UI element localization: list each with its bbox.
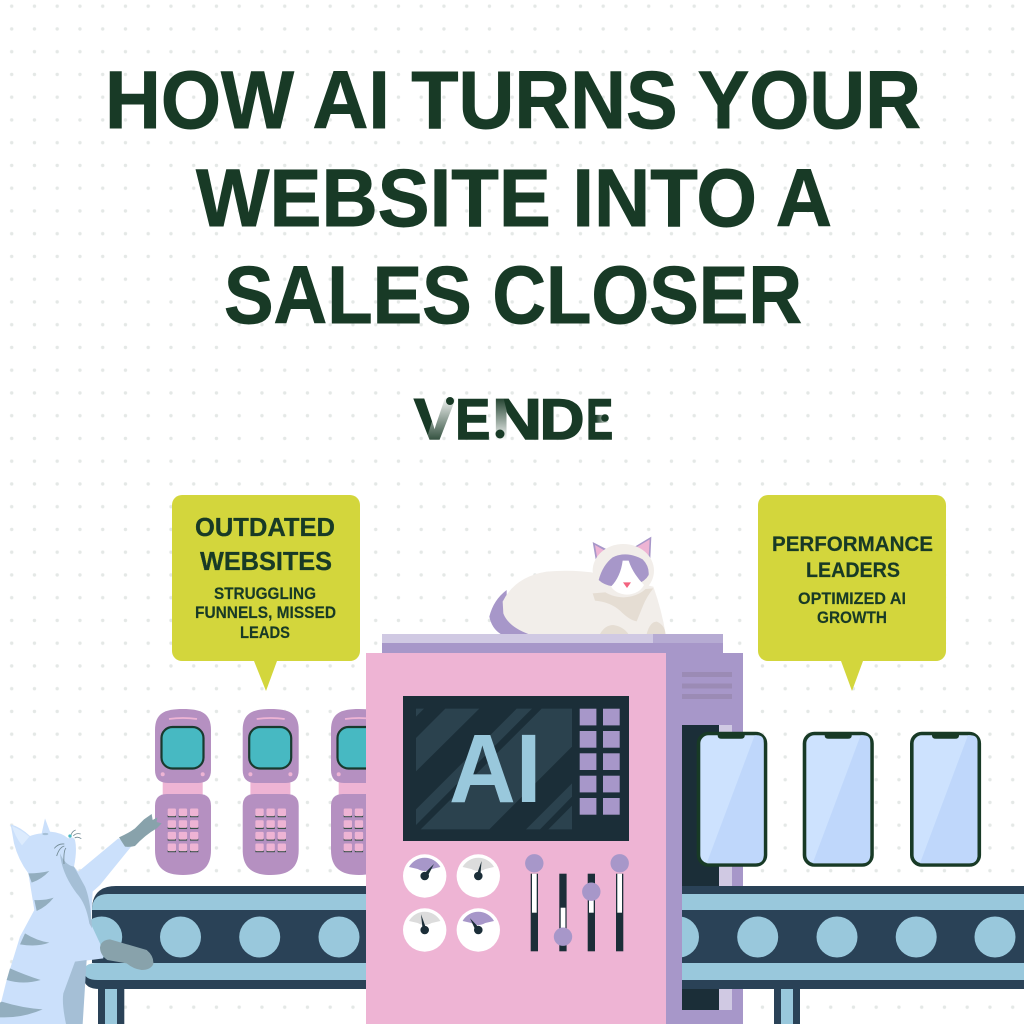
title: [105, 55, 921, 341]
callout: outdated websites: FUNNELS, MISSED: [195, 603, 336, 622]
flip phone 2: [243, 709, 299, 875]
callout: performance leaders: [758, 495, 946, 691]
inner ear: [12, 826, 29, 845]
logo: VENDE: V: [414, 388, 455, 452]
screen buttons: [580, 709, 620, 815]
control screen: [403, 696, 629, 841]
smartphones: [698, 734, 979, 865]
sliders: [525, 854, 629, 951]
callout: outdated websites: [172, 495, 360, 691]
callout: outdated websites: STRUGGLING: [214, 584, 316, 603]
callout: outdated websites: OUTDATED: [195, 512, 335, 542]
flip phone 1: [155, 709, 211, 875]
smartphone 3: [912, 734, 979, 865]
machine side: [666, 653, 743, 1024]
right conveyor belt: [658, 886, 1024, 1024]
callout: outdated websites: LEADS: [240, 623, 290, 642]
machine front: [366, 653, 666, 1024]
title: SALES CLOSER: [224, 250, 802, 341]
logo: VENDE: D: [540, 388, 584, 452]
logo: VENDE: [414, 388, 614, 452]
logo: VENDE: E: [586, 388, 613, 452]
AI machine: [366, 634, 743, 1024]
smartphone 1: [698, 734, 766, 865]
left conveyor belt: [81, 886, 370, 1024]
flip phone 3: [331, 709, 387, 875]
ragdoll cat lying on machine: [489, 537, 666, 634]
tabby cat reaching for the phones: [0, 814, 162, 1024]
callout: performance leaders: PERFORMANCE: [772, 533, 933, 556]
cat body: [0, 818, 132, 1024]
smartphone 2: [804, 734, 872, 865]
raised paw: [119, 814, 162, 847]
resting paw: [100, 939, 153, 970]
AI label: AI: [449, 714, 542, 823]
logo: VENDE: N: [492, 388, 542, 452]
callout: performance leaders: OPTIMIZED AI: [798, 589, 906, 608]
logo: VENDE: E: [455, 388, 490, 452]
belly shadow: [63, 960, 87, 1024]
face details: [42, 830, 81, 864]
callout: performance leaders: LEADERS: [806, 559, 900, 582]
title: HOW AI TURNS YOUR: [105, 55, 921, 146]
machine top slab: [382, 634, 723, 653]
stripes: [0, 871, 54, 1017]
gauges: [403, 854, 500, 952]
title: WEBSITE INTO A: [196, 153, 832, 244]
old flip phones: [155, 709, 387, 875]
callout: performance leaders: GROWTH: [817, 608, 887, 627]
callout: outdated websites: WEBSITES: [200, 546, 332, 576]
neck shadow: [60, 853, 92, 928]
